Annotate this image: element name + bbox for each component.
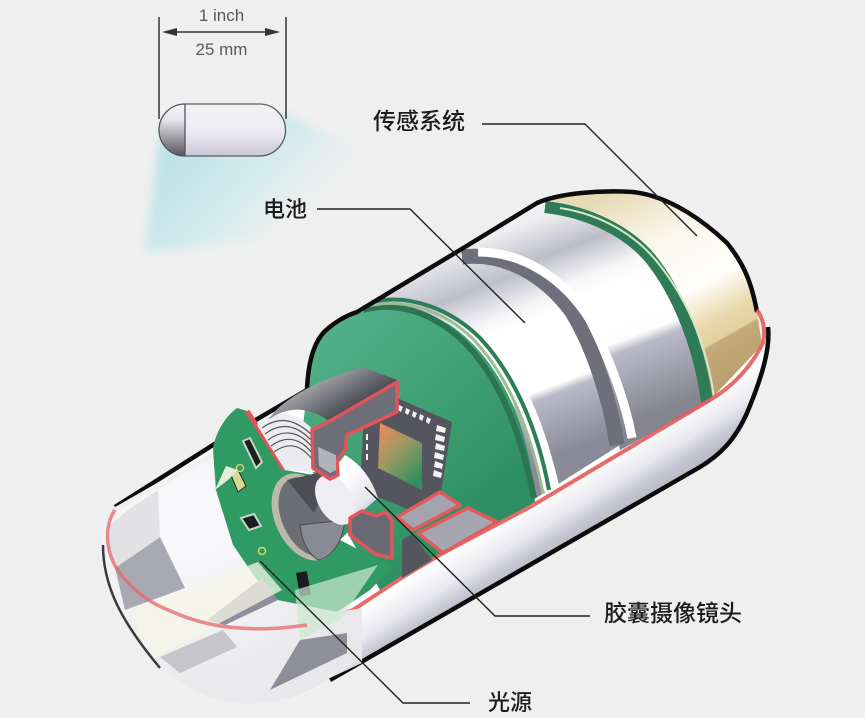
component top bbox=[243, 438, 262, 468]
dimension label inch: 1 inch bbox=[199, 6, 244, 25]
leader: sensing system bbox=[482, 124, 697, 236]
green disk face bbox=[300, 307, 535, 590]
board outline bbox=[213, 408, 392, 612]
leader lines bbox=[260, 124, 697, 703]
dark groove between batteries bbox=[462, 256, 617, 445]
leader: battery bbox=[317, 209, 525, 323]
groove highlight bbox=[478, 252, 632, 438]
sensor die bbox=[378, 423, 422, 490]
label: capsule camera lens: 胶囊摄像镜头 bbox=[604, 600, 742, 626]
red cut line on shell bbox=[108, 310, 764, 629]
image sensor chip bbox=[360, 398, 452, 510]
gold pad bbox=[258, 548, 266, 554]
capsule infographic bbox=[102, 9, 771, 712]
LED mount bbox=[231, 470, 246, 492]
dimension arrowheads bbox=[162, 28, 280, 36]
black top outline bbox=[115, 191, 757, 507]
dimension lines bbox=[159, 17, 286, 119]
red section upper barrel bbox=[312, 382, 397, 479]
lens thread lower bbox=[300, 520, 345, 560]
rear dome section bbox=[545, 191, 762, 398]
label: sensing system: 传感系统 bbox=[373, 108, 465, 134]
small capsule end cap bbox=[159, 104, 185, 156]
board edge red section bbox=[247, 411, 285, 470]
large capsule cutaway bbox=[102, 191, 768, 704]
lens threads bbox=[262, 421, 312, 459]
small capsule body bbox=[160, 104, 286, 156]
barrel tube bbox=[268, 367, 397, 435]
LED light cone right bbox=[295, 565, 378, 640]
gold pad upper bbox=[236, 464, 244, 472]
label: light source: 光源 bbox=[488, 690, 532, 715]
transparent front dome bbox=[102, 450, 378, 704]
lower grey wall bbox=[402, 534, 432, 578]
black bottom outline bbox=[330, 327, 768, 680]
green seal rear bbox=[545, 207, 707, 402]
silver battery section rear bbox=[460, 205, 710, 450]
LED light cone top bbox=[215, 466, 238, 490]
red section lower barrel bbox=[350, 511, 392, 558]
green disk rim bbox=[363, 307, 534, 498]
leader: camera lens bbox=[365, 487, 590, 616]
white cone to sensor bbox=[322, 455, 378, 530]
section highlight bbox=[318, 447, 336, 473]
label: battery: 电池 bbox=[263, 197, 307, 222]
lens rim bbox=[258, 463, 352, 571]
size reference: small capsule bbox=[145, 6, 365, 252]
red rim through dome bbox=[108, 510, 307, 629]
lower internal boxes bbox=[397, 492, 497, 553]
component lower bbox=[296, 571, 311, 597]
component middle bbox=[241, 514, 261, 530]
threaded upper barrel bbox=[257, 414, 315, 472]
lens assembly bbox=[257, 367, 432, 578]
lens interior bbox=[267, 468, 349, 566]
dome glass bbox=[102, 450, 362, 704]
chip package bbox=[360, 398, 452, 510]
dome grey facets bbox=[105, 490, 347, 690]
light beam from small capsule bbox=[145, 114, 365, 252]
printed circuit board bbox=[213, 408, 392, 612]
chip pins bbox=[366, 405, 446, 478]
outer shell lower half bbox=[102, 327, 768, 704]
white stripe beside rim bbox=[520, 395, 552, 490]
cylinder body bbox=[300, 191, 762, 590]
LED light cone left bbox=[130, 562, 282, 660]
lens inner facets bbox=[287, 472, 322, 513]
silver battery section front bbox=[357, 252, 620, 500]
lens aperture bbox=[307, 468, 363, 532]
dimension label mm: 25 mm bbox=[196, 40, 247, 59]
leader: light source bbox=[260, 561, 470, 703]
dome grey edge bbox=[103, 545, 160, 668]
